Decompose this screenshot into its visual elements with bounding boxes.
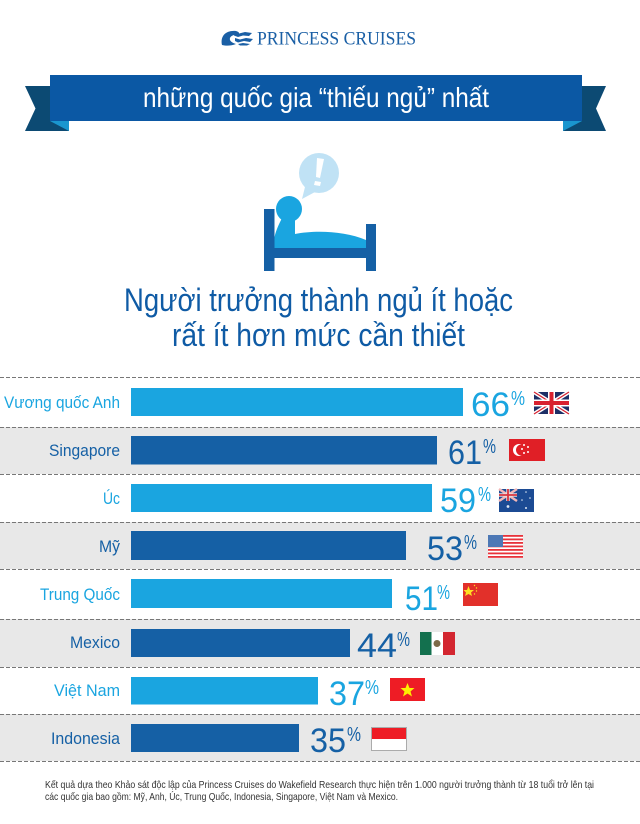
row: Singapore 61%: % [483,436,496,458]
row: Mexico 44% [70,627,455,665]
row: Úc 59% [103,482,534,520]
row: Singapore 61%: 61 [448,434,482,472]
row: Úc 59%: Úc [103,489,120,508]
row: Mexico 44%: 44 [357,627,397,665]
row: Indonesia 35%: Indonesia [51,729,121,748]
flag: USA [488,535,523,558]
row: Mỹ 53%: % [464,532,477,554]
row: Mỹ 53% [99,530,523,568]
row: Mỹ 53%: Mỹ [99,537,120,556]
row: Trung Quốc 51%: Trung Quốc [40,585,120,604]
row: Singapore 61% [49,434,545,472]
row: Mexico 44%: % [397,629,410,651]
row: Việt Nam 37%: Việt Nam [54,681,120,700]
footnote [45,779,594,803]
flag: UK [534,392,569,414]
logo: Princess Cruises: PRINCESS CRUISES [257,30,416,50]
flag: Indonesia [372,728,406,750]
row: Trung Quốc 51%: 51 [405,580,438,618]
flag: China [463,583,498,606]
row: Việt Nam 37% [54,675,425,713]
bar chart: sleep-deprived adults by country [0,378,640,762]
heading: rất ít hơn mức cần thiết [172,317,465,353]
row: Indonesia 35%: % [347,724,361,746]
flag: Singapore [509,439,545,461]
row: Việt Nam 37%: % [365,677,379,699]
row: Singapore 61%: Singapore [49,441,120,460]
flag: Mexico [420,632,455,655]
title ribbon [25,75,606,131]
row: Vương quốc Anh 66%: % [511,388,525,410]
flag: Australia [499,489,534,512]
icon: person awake in bed [264,153,376,271]
row: Mỹ 53%: 53 [427,530,463,568]
flag: Vietnam [390,678,425,701]
row: Úc 59%: 59 [440,482,476,520]
heading: Người trưởng thành ngủ ít hoặc [124,282,513,318]
row: Trung Quốc 51% [40,579,498,618]
row: Vương quốc Anh 66%: 66 [471,386,510,424]
title ribbon: những quốc gia “thiếu ngủ” nhất [143,82,489,113]
row: Vương quốc Anh 66%: Vương quốc Anh [4,393,120,412]
footnote: các quốc gia bao gồm: Mỹ, Anh, Úc, Trung Quốc, Indonesia, Singapore, Việt Nam và Mexico. [45,790,398,803]
row: Indonesia 35%: 35 [310,722,346,760]
row: Trung Quốc 51%: % [437,582,450,604]
row: Việt Nam 37%: 37 [329,675,365,713]
row: Indonesia 35% [51,722,406,760]
row: Vương quốc Anh 66% [4,386,569,424]
heading [124,282,513,353]
row: Úc 59%: % [478,484,491,506]
row: Mexico 44%: Mexico [70,633,120,652]
